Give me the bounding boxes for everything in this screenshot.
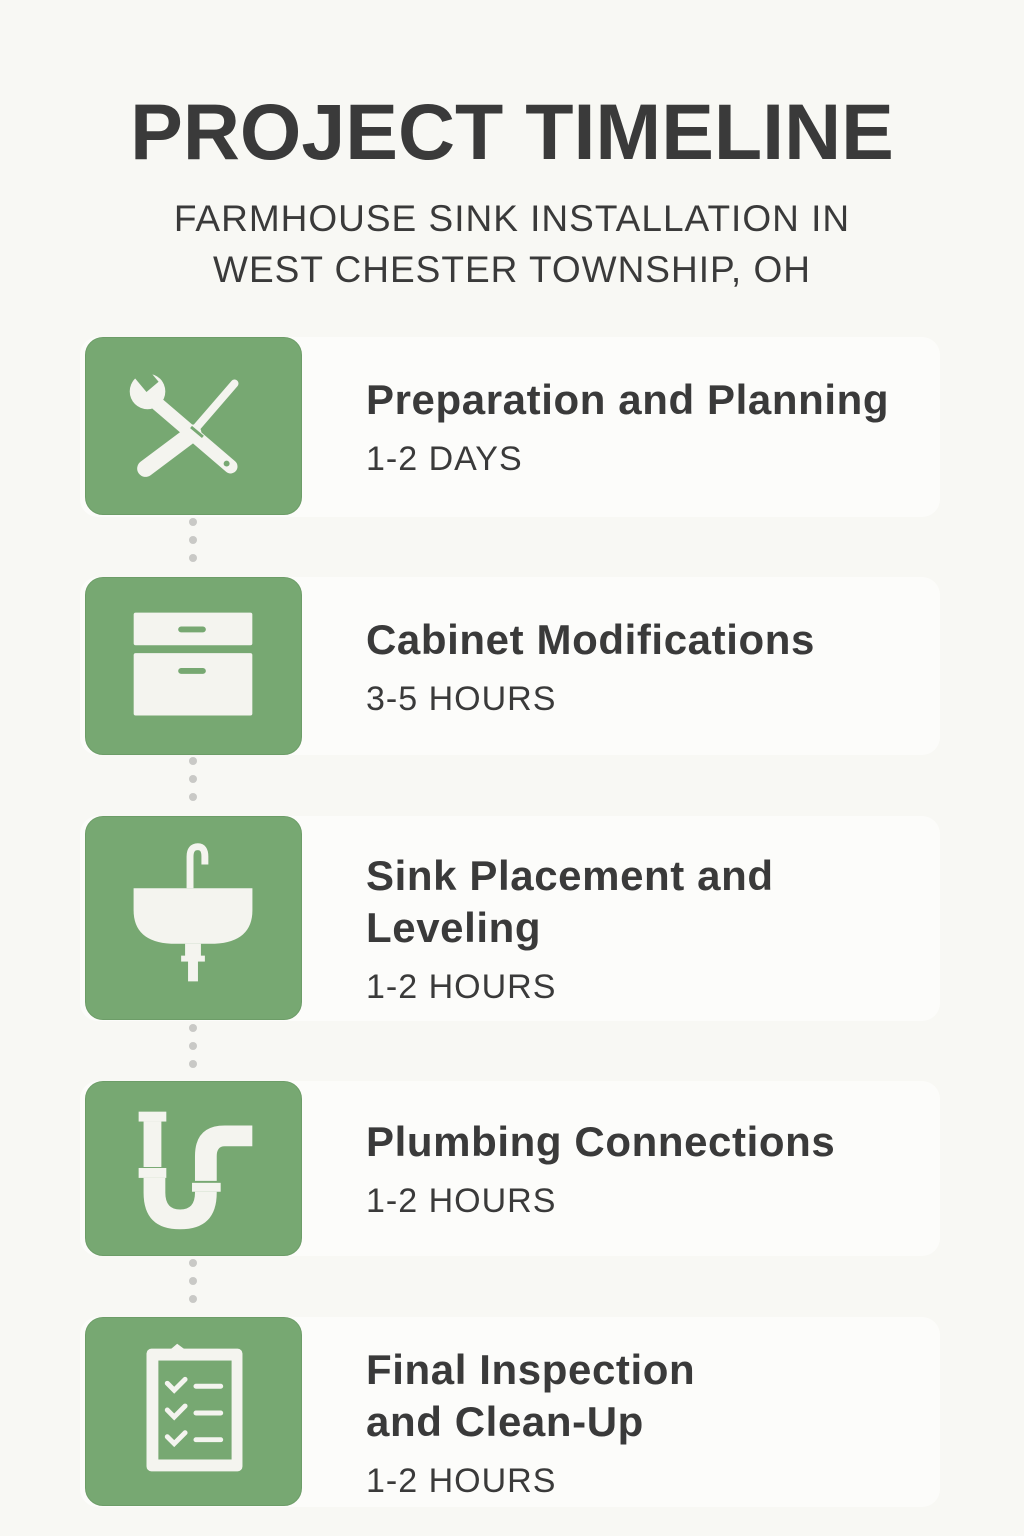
text: step 3 [366,852,774,1006]
text: step 4: 1-2 HOURS [366,1182,556,1220]
connector dots 3 [189,1024,197,1068]
text: step 4 [366,1118,835,1220]
text: step 1: Preparation and Planning [366,376,889,423]
text: step 5: and Clean-Up [366,1398,644,1445]
icon: wrench and screwdriver [85,337,302,515]
connector dots 1 [189,518,197,562]
subtitle: FARMHOUSE SINK INSTALLATION IN [174,198,850,239]
text: step 2 [366,616,815,718]
text: step 5: Final Inspection [366,1346,695,1393]
card: step 4 [80,1081,940,1256]
text: step 5 [366,1346,695,1500]
text: step 3: Leveling [366,904,541,951]
icon: cabinet [85,577,302,755]
icon: plumbing pipe [85,1081,302,1256]
text: step 1: 1-2 DAYS [366,440,523,478]
connector dots 2 [189,757,197,801]
text: step 1 [366,376,889,478]
card: step 3 [80,816,940,1021]
subtitle: WEST CHESTER TOWNSHIP, OH [213,249,811,290]
card: step 2 [80,577,940,755]
text: step 4: Plumbing Connections [366,1118,835,1165]
text: step 3: 1-2 HOURS [366,968,556,1006]
card: step 1 [80,337,940,517]
connector dots 4 [189,1259,197,1303]
text: step 2: 3-5 HOURS [366,680,556,718]
icon: sink [85,816,302,1020]
title: PROJECT TIMELINE [130,87,894,176]
text: step 2: Cabinet Modifications [366,616,815,663]
text: step 5: 1-2 HOURS [366,1462,556,1500]
subtitle [174,198,850,290]
card: step 5 [80,1317,940,1507]
icon: checklist clipboard [85,1317,302,1506]
text: step 3: Sink Placement and [366,852,774,899]
